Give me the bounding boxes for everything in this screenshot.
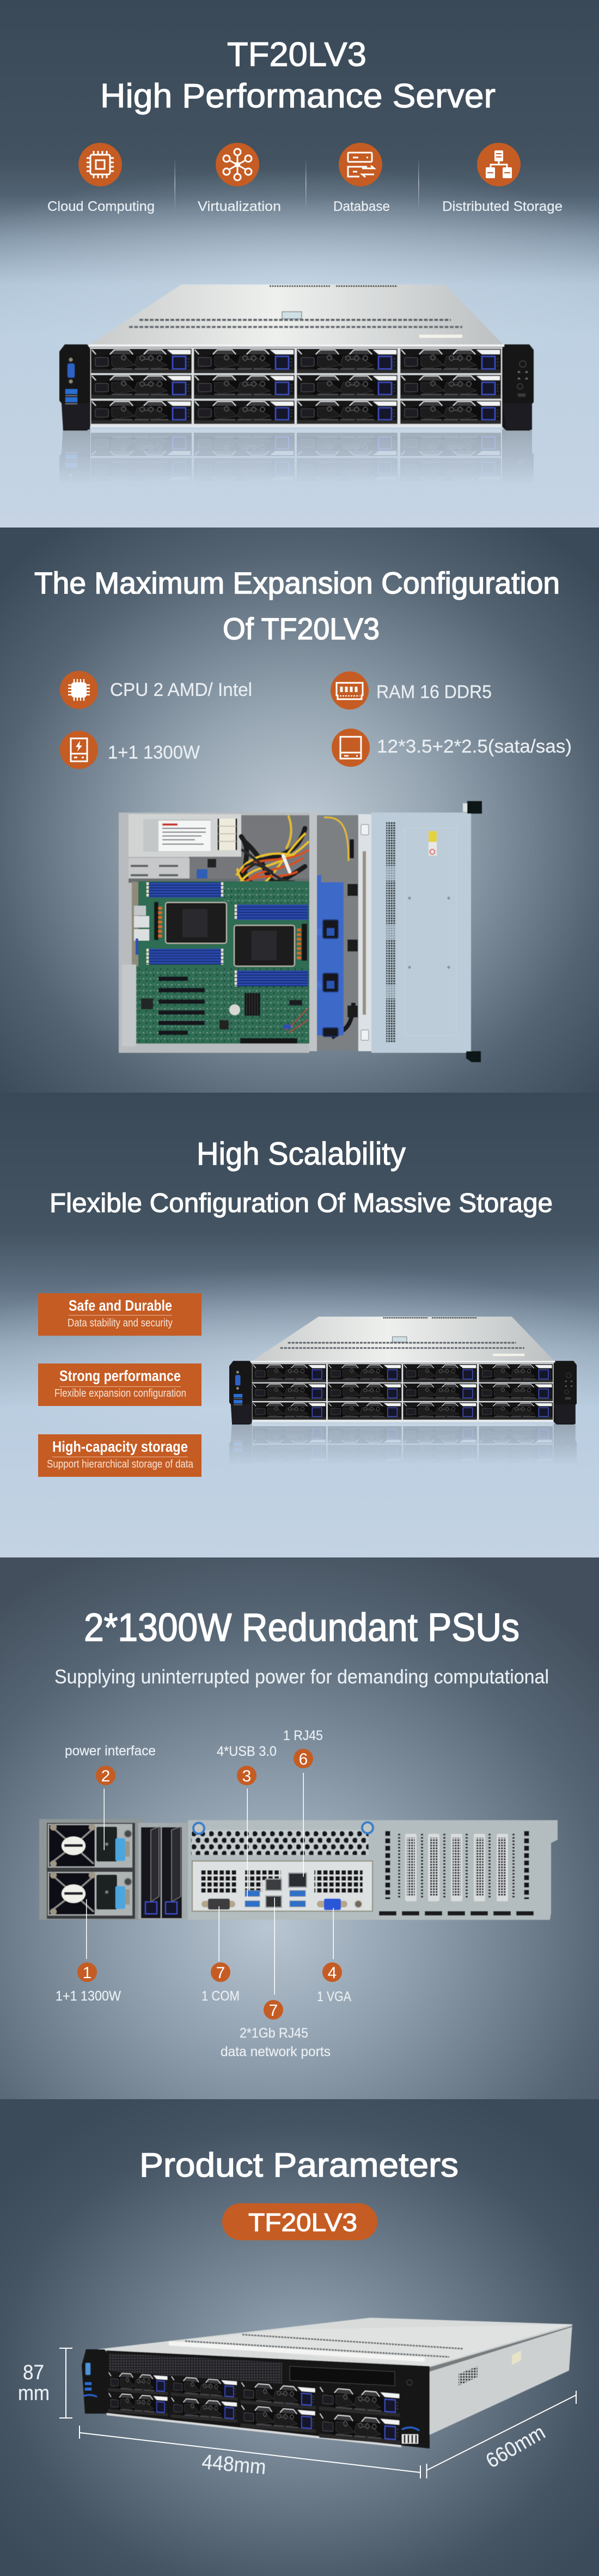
callout 2: power interface: 2: [101, 1767, 110, 1785]
dimension: height 87mm: 87: [23, 2361, 44, 2384]
expansion slots: [158, 977, 205, 1035]
subheading: Supplying uninterrupted power for demanding computational: [54, 1665, 549, 1688]
fan shroud: [317, 875, 358, 1037]
callout: safe and durable: Data stability and security: [68, 1317, 173, 1329]
heading: The Maximum Expansion Configuration: [34, 566, 560, 600]
dimension: width 448mm: [80, 2426, 420, 2479]
section: product parameters: [0, 2099, 599, 2576]
callout 3: usb: [217, 1744, 277, 1898]
model pill: [222, 2203, 377, 2240]
callout: safe and durable: Safe and Durable: [69, 1297, 172, 1314]
icon: ram: [331, 671, 369, 710]
right ear: [401, 2366, 430, 2448]
heading: 2*1300W Redundant PSUs: [84, 1606, 519, 1650]
chassis tray: [119, 813, 309, 1053]
callout 6: rj45: [283, 1728, 323, 1877]
callout: high-capacity storage: Support hierarchical storage of data: [47, 1458, 194, 1470]
callout 7: com: [201, 1906, 240, 2004]
bracket: [129, 858, 216, 878]
top cover removed panel: [371, 813, 471, 1053]
dimension: height 87mm: [18, 2348, 72, 2418]
icon: cpu: [60, 671, 98, 709]
section: redundant psus: [0, 1557, 599, 2099]
model pill: TF20LV3: [248, 2208, 357, 2236]
callout 1: 1+1 1300W: 1: [83, 1964, 91, 1982]
callout 3: usb: 4*USB 3.0: [217, 1744, 277, 1759]
callout 7: com: 7: [216, 1964, 225, 1982]
callout 7: data network ports: [221, 1898, 331, 2059]
callout 6: rj45: 1 RJ45: [283, 1728, 323, 1743]
title: High Performance Server: [100, 77, 496, 115]
server front photo: [59, 284, 534, 512]
icon: cloud computing chip: [78, 143, 122, 186]
left ear: [82, 2349, 108, 2414]
callout: high-capacity storage: High-capacity storage: [52, 1438, 188, 1455]
rear panel photo: [39, 1819, 558, 1920]
dimension: depth 660mm: [427, 2391, 576, 2478]
title: [100, 36, 496, 115]
icon: drive: [332, 729, 370, 767]
chassis body: [188, 1820, 558, 1920]
server perspective photo: [82, 2318, 572, 2448]
pcie slot brackets: [379, 1831, 535, 1913]
power supply unit: [129, 814, 241, 857]
memory slots: [148, 882, 308, 986]
cpu sockets: [166, 902, 295, 966]
callout: strong performance: Flexible expansion configuration: [54, 1387, 186, 1399]
drive backplane bar: [358, 814, 371, 1051]
label: cloud computing: Cloud Computing: [47, 199, 155, 214]
mounting ears: [463, 801, 482, 1062]
callout 6: rj45: 6: [299, 1750, 308, 1768]
psu housing: [39, 1819, 143, 1920]
voltage regulators: [154, 902, 307, 961]
heading: [50, 1136, 553, 1218]
callout 3: usb: 3: [242, 1767, 251, 1785]
callout: safe and durable: [38, 1293, 201, 1336]
icon: virtualization network: [216, 143, 259, 186]
callout 4: vga: [317, 1908, 351, 2004]
heading: Product Parameters: [139, 2147, 459, 2184]
callout 1: 1+1 1300W: 1+1 1300W: [56, 1989, 121, 2004]
heading: Flexible Configuration Of Massive Storage: [50, 1189, 553, 1218]
icon: database: [339, 143, 382, 186]
callout 7: data network ports: data network ports: [221, 2044, 331, 2059]
motherboard: [132, 881, 309, 1044]
label: distributed storage: Distributed Storage: [442, 199, 563, 214]
callout: high-capacity storage: [38, 1434, 201, 1477]
label: storage: 12*3.5+2*2.5(sata/sas): [377, 736, 572, 757]
board components: [141, 993, 308, 1044]
cross beam: [309, 813, 317, 1051]
callout 7: com: 1 COM: [201, 1989, 240, 2004]
dimension: width 448mm: 448mm: [201, 2451, 267, 2479]
chassis interior photo: [119, 801, 482, 1062]
section: maximum expansion configuration: [0, 528, 599, 1093]
callout 7: data network ports: 2*1Gb RJ45: [240, 2026, 308, 2041]
section: high scalability: [0, 1093, 599, 1557]
label: ram: RAM 16 DDR5: [376, 682, 492, 702]
wire bundle: [237, 816, 308, 888]
side panel: [430, 2324, 572, 2435]
front panel: [107, 2350, 430, 2448]
callout: strong performance: Strong performance: [59, 1367, 181, 1384]
hex vent: [191, 1830, 369, 1855]
io plate: [192, 1861, 372, 1911]
label: cpu: CPU 2 AMD/ Intel: [110, 680, 252, 700]
drive bays: [108, 2372, 400, 2444]
heading: High Scalability: [197, 1136, 406, 1172]
server front photo: [229, 1317, 577, 1485]
heading: [34, 566, 560, 646]
callout 4: vga: 1 VGA: [317, 1989, 351, 2004]
callout 2: power interface: power interface: [65, 1743, 156, 1759]
thumb screws: [193, 1822, 373, 1834]
icon: power supply: [60, 731, 98, 769]
heading: Of TF20LV3: [223, 611, 380, 646]
callout 2: power interface: [65, 1743, 156, 1850]
drive bays: [138, 1823, 187, 1919]
title: TF20LV3: [227, 36, 366, 74]
icon: distributed storage: [477, 143, 521, 186]
label: power: 1+1 1300W: [108, 742, 200, 763]
callout 4: vga: 4: [328, 1964, 337, 1982]
callout 7: data network ports: 7: [269, 2002, 278, 2020]
callout 1: 1+1 1300W: [56, 1899, 121, 2004]
label: database: Database: [333, 199, 390, 214]
callout: strong performance: [38, 1363, 201, 1406]
dimension: depth 660mm: 660mm: [482, 2421, 549, 2473]
section: hero: [0, 0, 599, 528]
top cover: [93, 2318, 572, 2366]
fan bay: [317, 815, 358, 1050]
label: virtualization: Virtualization: [198, 199, 281, 214]
dimension: height 87mm: mm: [18, 2382, 50, 2405]
